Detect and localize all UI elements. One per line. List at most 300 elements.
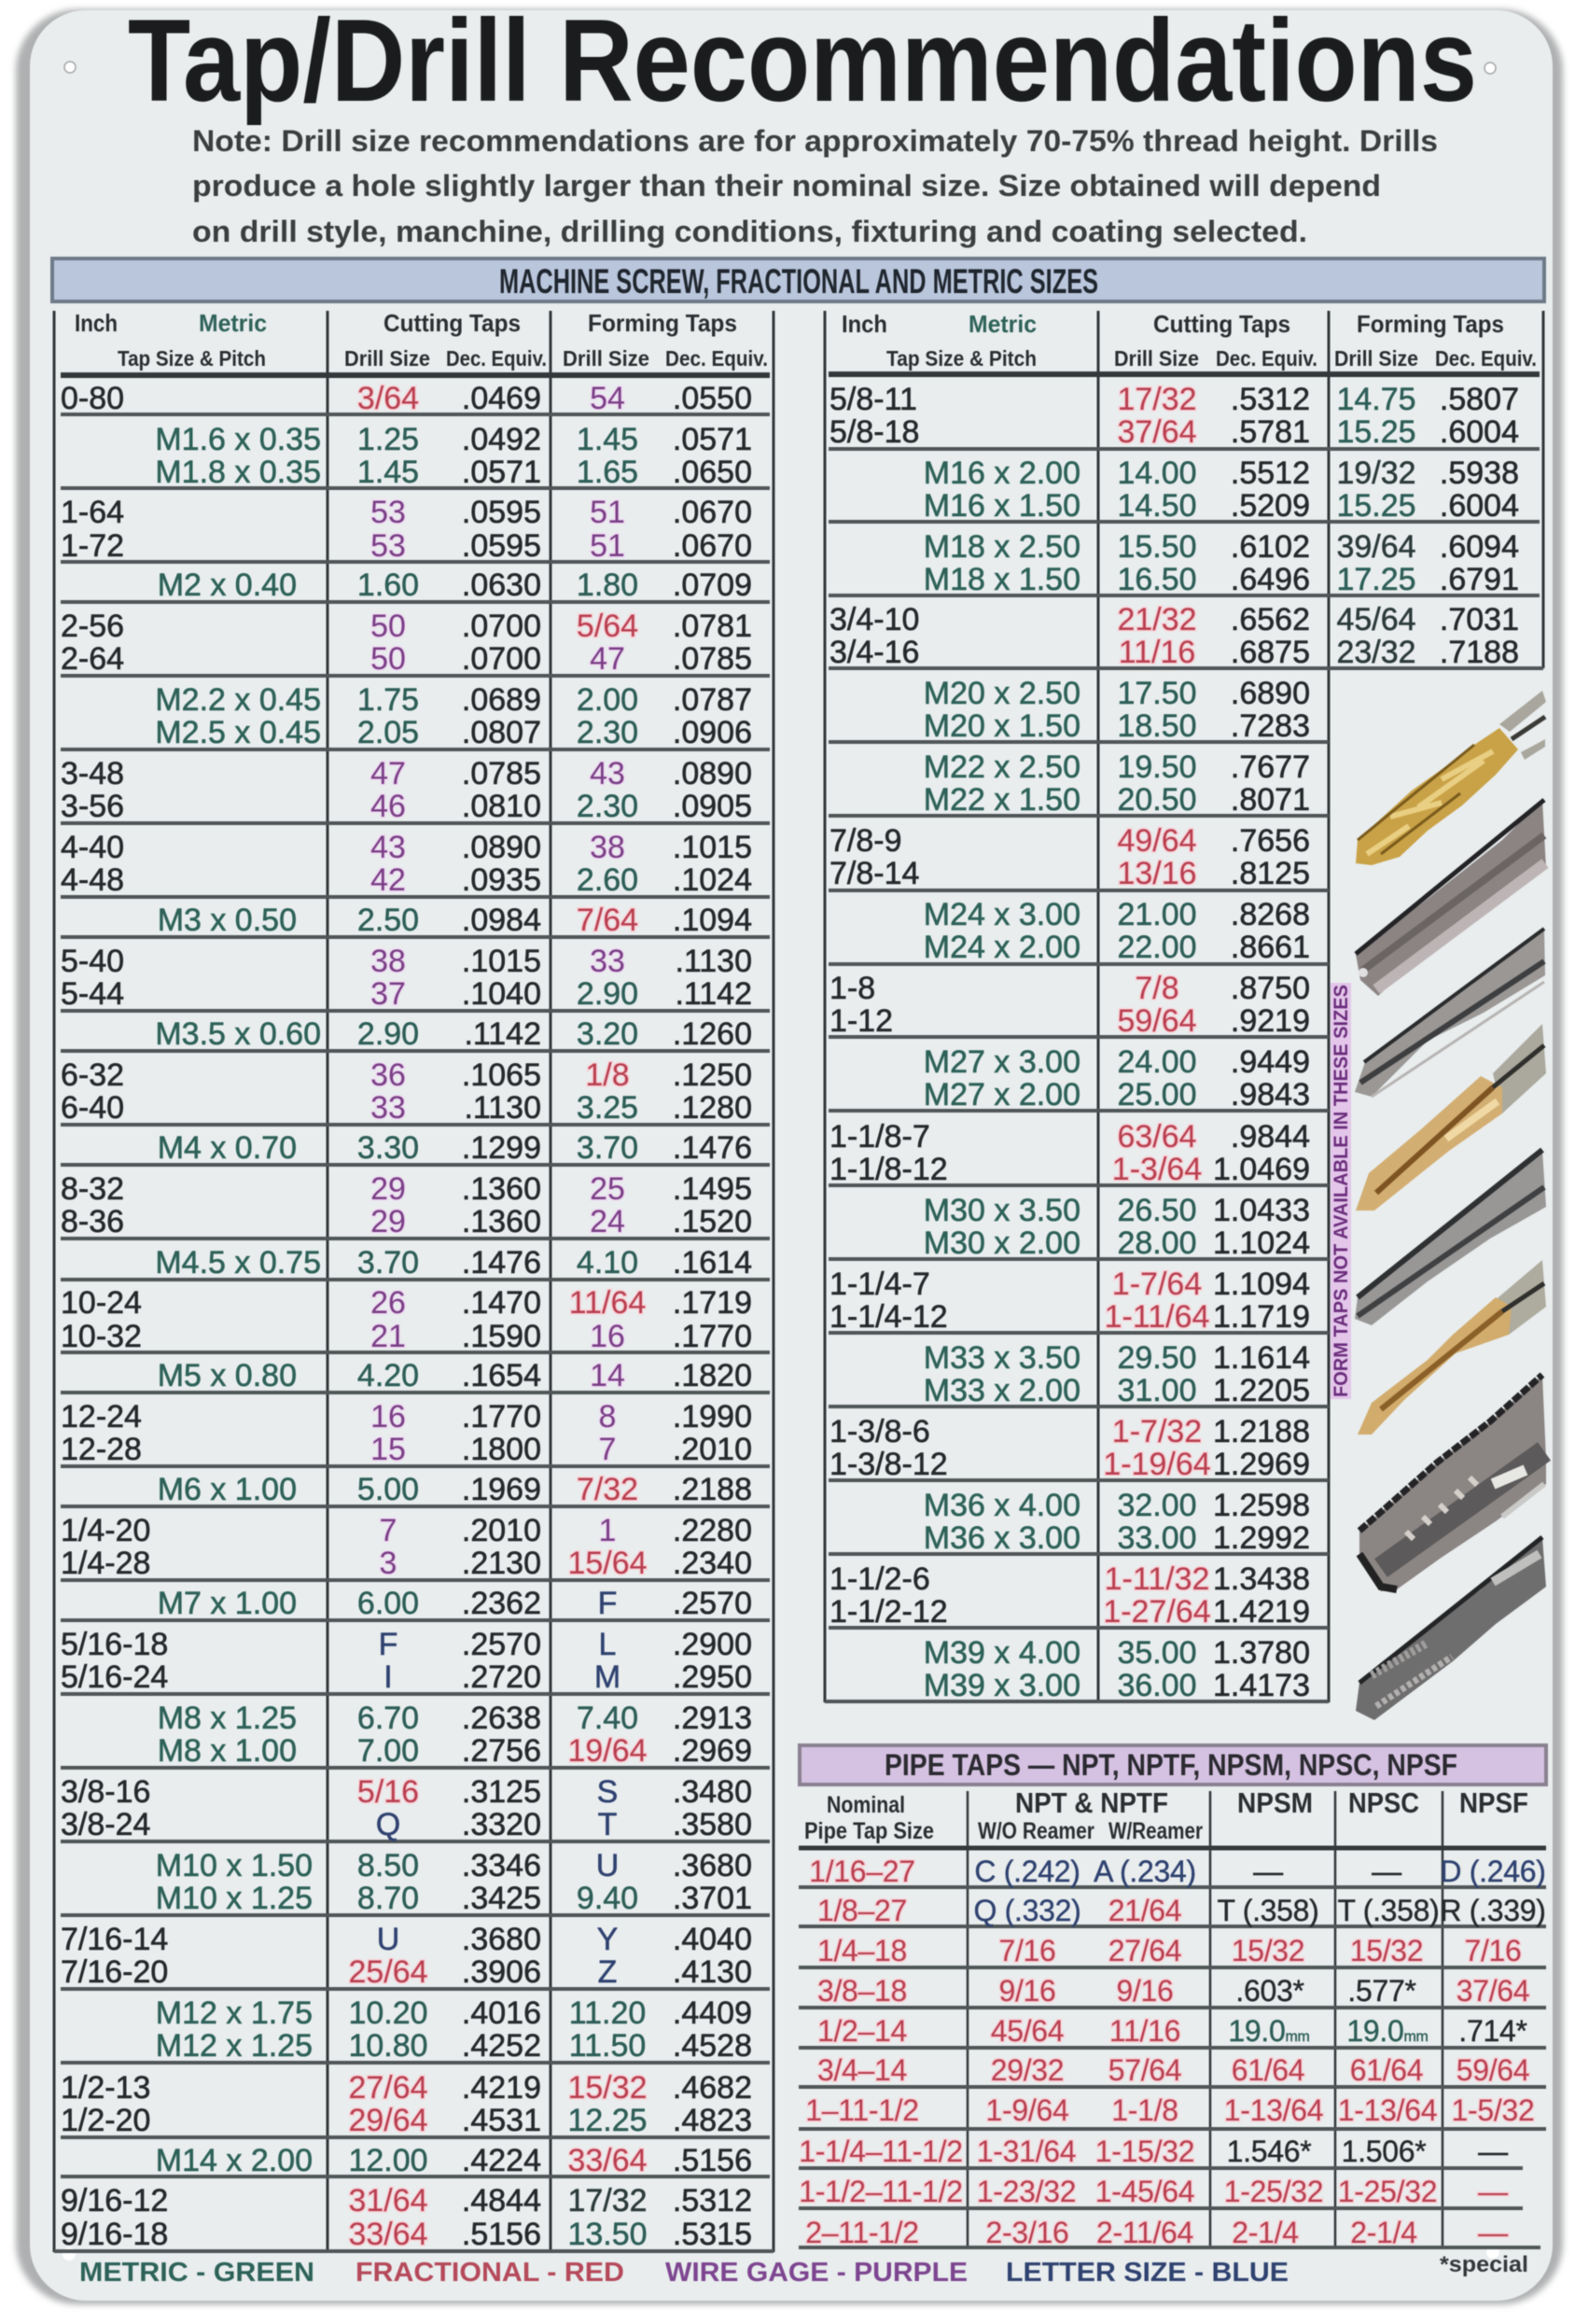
left table data rows: .0595 — [462, 495, 541, 530]
right table data rows: M33 x 3.50 — [924, 1340, 1080, 1376]
left table data rows: 4.10 — [577, 1245, 638, 1281]
left table data rows: 10-24 — [61, 1285, 142, 1321]
left table data rows: 8.70 — [357, 1881, 419, 1916]
left table data rows: 16 — [590, 1319, 625, 1354]
right table data rows: 26.50 — [1117, 1193, 1197, 1228]
pipe table data rows: 1-1/4–11-1/2 — [799, 2135, 963, 2168]
pipe table data rows: 1-15/32 — [1095, 2135, 1194, 2168]
pipe table data rows: 61/64 — [1232, 2053, 1304, 2087]
right table data rows: 14.00 — [1117, 455, 1197, 491]
left table data rows: .5315 — [673, 2217, 752, 2252]
right table data rows: .5512 — [1231, 455, 1310, 491]
left table data rows: .1495 — [673, 1171, 752, 1207]
left table data rows: 10.20 — [348, 1995, 428, 2031]
right table data rows: 14.50 — [1117, 488, 1197, 524]
left table data rows: 2.90 — [357, 1016, 419, 1052]
pipe table data rows: 1/8–27 — [817, 1894, 907, 1927]
right table data rows: .8750 — [1231, 971, 1310, 1006]
left table data rows: .1969 — [462, 1472, 541, 1507]
left table data rows: 6.00 — [357, 1586, 419, 1621]
right table data rows: 17.50 — [1117, 676, 1197, 711]
right table data rows: .6004 — [1440, 414, 1519, 450]
left table data rows: 3-56 — [61, 789, 124, 824]
right table data rows: .8268 — [1231, 897, 1310, 932]
pipe table data rows: R (.339) — [1440, 1894, 1546, 1927]
left table data rows: .1260 — [673, 1016, 752, 1052]
left table data rows: .2570 — [462, 1627, 541, 1662]
left table data rows: .2188 — [673, 1472, 752, 1507]
left table data rows: 7 — [380, 1513, 397, 1548]
left table data rows: .3701 — [673, 1881, 752, 1916]
right table data rows: 1-1/4-12 — [829, 1299, 948, 1335]
pipe table data rows: 29/32 — [991, 2053, 1064, 2087]
right table data rows: 1.0433 — [1213, 1193, 1310, 1228]
left table data rows: 2.05 — [357, 715, 419, 750]
right table data rows: 1-1/8-7 — [829, 1119, 930, 1155]
pipe table data rows: 1-13/64 — [1338, 2093, 1437, 2127]
left table data rows: .2340 — [673, 1546, 752, 1581]
left table data rows: M3 x 0.50 — [158, 903, 297, 938]
left table data rows: 7/32 — [577, 1472, 638, 1507]
pipe table data rows: 1-25/32 — [1224, 2175, 1323, 2208]
left table data rows: .0689 — [462, 682, 541, 718]
right table data rows: .5312 — [1231, 382, 1310, 417]
pipe table data rows: 21/64 — [1108, 1894, 1181, 1927]
left table data rows: 3.70 — [577, 1130, 638, 1166]
left table data rows: 3/64 — [357, 381, 419, 416]
left table data rows: 3/8-16 — [61, 1774, 150, 1810]
left table data rows: 53 — [370, 495, 406, 530]
left table data rows: .1015 — [462, 944, 541, 979]
right table data rows: 1.1719 — [1213, 1299, 1310, 1335]
right table data rows: M22 x 1.50 — [924, 782, 1080, 818]
pipe table column headers: NPSM — [1237, 1786, 1313, 1819]
left table data rows: 2.50 — [357, 903, 419, 938]
left table data rows: .2010 — [462, 1513, 541, 1548]
left table data rows: .0571 — [673, 422, 752, 457]
left table data rows: M8 x 1.25 — [158, 1701, 297, 1736]
left table data rows: .0905 — [673, 789, 752, 824]
left table data rows: .2720 — [462, 1659, 541, 1695]
right table data rows: M16 x 1.50 — [924, 488, 1080, 524]
pipe table data rows: 1-1/2–11-1/2 — [799, 2175, 963, 2208]
left table data rows: M1.8 x 0.35 — [155, 455, 321, 490]
left table data rows: 2-56 — [61, 609, 124, 644]
right table data rows: .8125 — [1231, 856, 1310, 891]
left table data rows: 50 — [370, 609, 406, 644]
right table data rows: 5/8-18 — [829, 414, 919, 450]
left table data rows: .4531 — [462, 2103, 541, 2138]
left table data rows: .0595 — [462, 528, 541, 564]
pipe table data rows: — — [1478, 2216, 1508, 2249]
left table grid — [54, 311, 774, 2252]
left table data rows: M3.5 x 0.60 — [155, 1016, 321, 1052]
left table column headers: Tap Size & Pitch — [118, 346, 266, 371]
left table data rows: .1130 — [675, 944, 752, 979]
right table grid — [825, 311, 1543, 1702]
left table data rows: .4528 — [673, 2028, 752, 2064]
left table column headers: Forming Taps — [588, 309, 737, 337]
left table data rows: .1024 — [673, 862, 752, 898]
pipe table data rows: 3/4–14 — [817, 2053, 907, 2087]
left table data rows: 51 — [590, 495, 625, 530]
right table data rows: .5938 — [1440, 455, 1519, 491]
right table data rows: .7656 — [1231, 823, 1310, 859]
left table data rows: 12.00 — [348, 2143, 428, 2178]
left table data rows: M5 x 0.80 — [158, 1358, 297, 1393]
right table data rows: 1.1024 — [1213, 1225, 1310, 1261]
right table data rows: .8661 — [1231, 930, 1310, 965]
pipe table data rows: 1-31/64 — [977, 2135, 1076, 2168]
right table data rows: 25.00 — [1117, 1077, 1197, 1113]
left table data rows: 1/2-13 — [61, 2070, 150, 2106]
right table data rows: .7031 — [1440, 602, 1519, 637]
left table data rows — [61, 381, 752, 2252]
right table data rows: 15.25 — [1336, 414, 1416, 450]
left table data rows: 1.75 — [357, 682, 419, 718]
note text block: produce a hole slightly larger than their nominal size. Size obtained will depend — [192, 169, 1381, 203]
left table data rows: .0785 — [673, 641, 752, 677]
right table data rows: 1.2969 — [1213, 1447, 1310, 1482]
left table data rows: .1520 — [673, 1204, 752, 1239]
pipe table data rows: 59/64 — [1457, 2053, 1529, 2087]
right table data rows: .6562 — [1231, 602, 1310, 637]
right table data rows: .6102 — [1231, 529, 1310, 565]
right table data rows: 1.3780 — [1213, 1635, 1310, 1671]
left table data rows: .2900 — [673, 1627, 752, 1662]
right table column headers: Inch — [842, 310, 887, 338]
left table data rows: 8-36 — [61, 1204, 124, 1239]
left table data rows: 1/8 — [585, 1057, 630, 1093]
right table data rows: 13/16 — [1117, 856, 1197, 891]
left table data rows: 17/32 — [567, 2183, 648, 2219]
colour legend: FRACTIONAL - RED — [355, 2258, 624, 2288]
left table data rows: .1142 — [464, 1016, 541, 1052]
pipe table data rows: 9/16 — [998, 1974, 1056, 2008]
right table data rows: .9219 — [1231, 1003, 1310, 1039]
left table data rows: .0935 — [462, 862, 541, 898]
right table data rows: 19.50 — [1117, 749, 1197, 785]
left table data rows: 10-32 — [61, 1319, 142, 1354]
right table data rows: 32.00 — [1117, 1488, 1197, 1523]
pipe table grid — [799, 1791, 1546, 2247]
pipe table data rows: — — [1253, 1855, 1283, 1888]
section heading bar: machine screw sizes: MACHINE SCREW, FRACTIONAL AND METRIC SIZES — [499, 262, 1098, 301]
right table data rows: M16 x 2.00 — [924, 455, 1080, 491]
right table data rows: .7677 — [1231, 749, 1310, 785]
right table data rows: 23/32 — [1336, 635, 1416, 670]
left table data rows: 42 — [370, 862, 406, 898]
left table data rows: 11.20 — [569, 1995, 646, 2031]
left table data rows: 46 — [370, 789, 406, 824]
left table data rows: .0670 — [673, 528, 752, 564]
icon: mounting hole bottom left — [63, 2247, 76, 2261]
pipe table column headers: Pipe Tap Size — [804, 1818, 934, 1844]
colour legend: WIRE GAGE - PURPLE — [665, 2258, 968, 2288]
left table data rows: .0571 — [462, 455, 541, 490]
left table data rows: 8 — [599, 1399, 616, 1435]
right table data rows: .9843 — [1231, 1077, 1310, 1113]
right table data rows: 1.3438 — [1213, 1561, 1310, 1597]
pipe table data rows: 15/32 — [1350, 1934, 1423, 1967]
left table data rows: 1 — [599, 1513, 616, 1548]
pipe table data rows: 1-45/64 — [1095, 2175, 1194, 2208]
left table column headers: Inch — [75, 309, 118, 337]
pipe table data rows: — — [1372, 1855, 1401, 1888]
left table data rows: 31/64 — [348, 2183, 428, 2219]
left table data rows: 33/64 — [567, 2143, 648, 2178]
right table data rows: M24 x 2.00 — [924, 930, 1080, 965]
left table data rows: .1476 — [673, 1130, 752, 1166]
left table data rows: .3580 — [673, 1807, 752, 1842]
left table data rows: 3/8-24 — [61, 1807, 150, 1842]
left table data rows: 38 — [370, 944, 406, 979]
left table data rows: .3480 — [673, 1774, 752, 1810]
right table data rows: .6890 — [1231, 676, 1310, 711]
left table data rows: .0469 — [462, 381, 541, 416]
left table data rows: .0810 — [462, 789, 541, 824]
pipe table data rows: 2-1/4 — [1232, 2216, 1299, 2249]
left table data rows: 15 — [370, 1432, 406, 1467]
left table data rows: 6.70 — [357, 1701, 419, 1736]
pipe table data rows: 7/16 — [1464, 1934, 1522, 1967]
pipe table data rows: D (.246) — [1440, 1855, 1546, 1888]
left table data rows: .3906 — [462, 1954, 541, 1990]
right table column headers: Drill Size — [1114, 346, 1199, 371]
left table data rows: 38 — [590, 830, 625, 865]
colour legend: METRIC - GREEN — [79, 2258, 314, 2288]
left table data rows: 2.30 — [577, 715, 638, 750]
right table data rows: .6791 — [1440, 562, 1519, 597]
left table data rows: .1654 — [462, 1358, 541, 1393]
right table data rows: .5781 — [1231, 414, 1310, 450]
right table data rows: 21/32 — [1117, 602, 1197, 637]
left table data rows: 15/32 — [567, 2070, 648, 2106]
left table data rows: .0550 — [673, 381, 752, 416]
left table data rows: 1/4-28 — [61, 1546, 150, 1581]
left table data rows: .4219 — [462, 2070, 541, 2106]
left table data rows: 9/16-18 — [61, 2217, 168, 2252]
pipe table data rows: 1-5/32 — [1452, 2093, 1534, 2127]
pipe table data rows: T (.358) — [1217, 1894, 1319, 1927]
pipe table data rows: 61/64 — [1350, 2053, 1423, 2087]
left table data rows: .5156 — [673, 2143, 752, 2178]
left table column headers: Drill Size — [344, 346, 430, 371]
left table column headers: Metric — [199, 309, 267, 337]
footnote: special: *special — [1440, 2252, 1528, 2277]
right table data rows: 1-11/64 — [1105, 1299, 1209, 1335]
left table data rows: 1.65 — [577, 455, 638, 490]
pipe table data rows: 1/16–27 — [809, 1855, 915, 1888]
left table data rows: .4682 — [673, 2070, 752, 2106]
left table data rows: 5-40 — [61, 944, 124, 979]
right table data rows: 1-3/8-6 — [829, 1414, 930, 1449]
left table data rows: 9.40 — [577, 1881, 638, 1916]
left table data rows: M2 x 0.40 — [158, 567, 297, 603]
left table data rows: 47 — [370, 756, 406, 791]
panel: pipe taps table — [799, 1786, 1546, 2249]
pipe table data rows: 1.506* — [1342, 2135, 1426, 2168]
left table data rows: .2913 — [673, 1701, 752, 1736]
right table data rows: 1-27/64 — [1103, 1594, 1211, 1630]
left table data rows: 1-72 — [61, 528, 124, 564]
left table data rows: .3346 — [462, 1848, 541, 1883]
left table data rows: 11/64 — [569, 1285, 646, 1321]
left table data rows: Q — [376, 1807, 400, 1842]
left table data rows: .1476 — [462, 1245, 541, 1281]
left table data rows: 3.30 — [357, 1130, 419, 1166]
left table data rows: .1280 — [673, 1090, 752, 1126]
right table data rows: .6875 — [1231, 635, 1310, 670]
right table data rows: 37/64 — [1117, 414, 1197, 450]
left table data rows: F — [598, 1586, 617, 1621]
right table data rows: 29.50 — [1117, 1340, 1197, 1376]
left table data rows: 14 — [590, 1358, 625, 1393]
left table data rows: .0807 — [462, 715, 541, 750]
pipe table data rows: 19.0mm — [1346, 2014, 1429, 2048]
right table data rows: 59/64 — [1117, 1003, 1197, 1039]
left table data rows: M10 x 1.50 — [156, 1848, 313, 1883]
left table data rows: .1590 — [462, 1319, 541, 1354]
right table column headers: Drill Size — [1334, 346, 1418, 371]
right table data rows: M36 x 4.00 — [924, 1488, 1080, 1523]
panel: right tap table — [825, 310, 1543, 1703]
right table data rows: .7188 — [1440, 635, 1519, 670]
left table data rows: 3-48 — [61, 756, 124, 791]
left table data rows: Y — [597, 1922, 618, 1957]
icon: gold spiral point tap — [1356, 1024, 1546, 1211]
left table data rows: 7 — [599, 1432, 616, 1467]
left table data rows: .0787 — [673, 682, 752, 718]
pipe table data rows: C (.242) — [974, 1855, 1080, 1888]
right table data rows: M20 x 2.50 — [924, 676, 1080, 711]
left table data rows: 1.45 — [357, 455, 419, 490]
right table data rows: 3/4-10 — [829, 602, 919, 637]
right table data rows: 7/8-14 — [829, 856, 919, 891]
left table data rows: 1-64 — [61, 495, 124, 530]
right table data rows: .6496 — [1231, 562, 1310, 597]
left table data rows: M14 x 2.00 — [156, 2143, 313, 2178]
left table data rows: 4-48 — [61, 862, 124, 898]
left table data rows: .0906 — [673, 715, 752, 750]
right table data rows: M27 x 2.00 — [924, 1077, 1080, 1113]
right table data rows: 15.25 — [1336, 488, 1416, 524]
left table data rows: 11.50 — [569, 2028, 646, 2064]
left table data rows: 7/64 — [577, 903, 638, 938]
left table data rows: .1360 — [462, 1204, 541, 1239]
left table data rows: .5156 — [462, 2217, 541, 2252]
right table data rows: 1-1/4-7 — [829, 1267, 930, 1302]
right table data rows: 14.75 — [1336, 382, 1416, 417]
right table data rows: 35.00 — [1117, 1635, 1197, 1671]
left table data rows: .1990 — [673, 1399, 752, 1435]
left table data rows: 8-32 — [61, 1171, 124, 1207]
left table data rows: 1/2-20 — [61, 2103, 150, 2138]
pipe table data rows: T (.358) — [1337, 1894, 1440, 1927]
left table data rows: .2950 — [673, 1659, 752, 1695]
left table data rows: .1360 — [462, 1171, 541, 1207]
left table data rows: 29 — [370, 1171, 406, 1207]
right table data rows — [829, 382, 1519, 1703]
section heading bar: pipe taps: PIPE TAPS — NPT, NPTF, NPSM, NPSC, NPSF — [885, 1748, 1457, 1782]
right table data rows: 7/8 — [1135, 971, 1179, 1006]
right table data rows: .6004 — [1440, 488, 1519, 524]
left table data rows: .4252 — [462, 2028, 541, 2064]
left table data rows: 37 — [370, 976, 406, 1012]
right table data rows: .6094 — [1440, 529, 1519, 565]
left table data rows: S — [597, 1774, 618, 1810]
left table data rows: .0785 — [462, 756, 541, 791]
right table data rows: 1-3/8-12 — [829, 1447, 948, 1482]
right table data rows: 1.2205 — [1213, 1373, 1310, 1408]
left table data rows: 2-64 — [61, 641, 124, 677]
left table data rows: 3.25 — [577, 1090, 638, 1126]
right table data rows: M39 x 4.00 — [924, 1635, 1080, 1671]
left table column headers: Dec. Equiv. — [446, 346, 547, 371]
left table data rows: .0984 — [462, 903, 541, 938]
colour legend: LETTER SIZE - BLUE — [1006, 2258, 1289, 2288]
pipe table data rows: 1-9/64 — [986, 2093, 1068, 2127]
right table data rows: 24.00 — [1117, 1044, 1197, 1080]
left table data rows: 12-28 — [61, 1432, 142, 1467]
left table data rows: M8 x 1.00 — [158, 1733, 297, 1769]
left table data rows: 1.80 — [577, 567, 638, 603]
left table data rows: 43 — [370, 830, 406, 865]
right table data rows: 49/64 — [1117, 823, 1197, 859]
right table column headers: Forming Taps — [1357, 310, 1504, 338]
left table data rows: .1250 — [673, 1057, 752, 1093]
left table data rows: 51 — [590, 528, 625, 564]
pipe table data rows: A (.234) — [1094, 1855, 1196, 1888]
left table column headers: Dec. Equiv. — [665, 346, 768, 371]
left table data rows: .1299 — [462, 1130, 541, 1166]
left table data rows: 25/64 — [348, 1954, 428, 1990]
left table data rows: .0700 — [462, 641, 541, 677]
pipe table data rows: 19.0mm — [1228, 2014, 1310, 2048]
left table data rows: .0709 — [673, 567, 752, 603]
right table data rows: .9844 — [1231, 1119, 1310, 1155]
right table data rows: 1-1/8-12 — [829, 1152, 948, 1187]
pipe table column headers: NPSF — [1459, 1786, 1528, 1819]
right table data rows: 1-1/2-6 — [829, 1561, 930, 1597]
right table column headers: Dec. Equiv. — [1216, 346, 1317, 371]
left table data rows: .3680 — [673, 1848, 752, 1883]
pipe table column headers: NPSC — [1348, 1786, 1419, 1819]
left table data rows: .4224 — [462, 2143, 541, 2178]
left table data rows: .2280 — [673, 1513, 752, 1548]
left table data rows: 5/64 — [577, 609, 638, 644]
left table data rows: M12 x 1.75 — [156, 1995, 313, 2031]
right table data rows: 63/64 — [1117, 1119, 1197, 1155]
pipe table data rows: 57/64 — [1108, 2053, 1181, 2087]
pipe table data rows: 11/16 — [1109, 2014, 1180, 2048]
left table data rows: .2969 — [673, 1733, 752, 1769]
right table data rows: 22.00 — [1117, 930, 1197, 965]
right table data rows: 1.0469 — [1213, 1152, 1310, 1187]
right table data rows: .5209 — [1231, 488, 1310, 524]
right table column headers — [842, 310, 1537, 371]
left table data rows: .2570 — [673, 1586, 752, 1621]
left table data rows: .0650 — [673, 455, 752, 490]
pipe table data rows: .577* — [1347, 1974, 1416, 2008]
note text block — [192, 124, 1438, 248]
left table data rows: .4823 — [673, 2103, 752, 2138]
left table data rows: 4.20 — [357, 1358, 419, 1393]
left table data rows: .1770 — [673, 1319, 752, 1354]
left table data rows: 33/64 — [348, 2217, 428, 2252]
left table data rows: M12 x 1.25 — [156, 2028, 313, 2064]
left table data rows: .0890 — [462, 830, 541, 865]
